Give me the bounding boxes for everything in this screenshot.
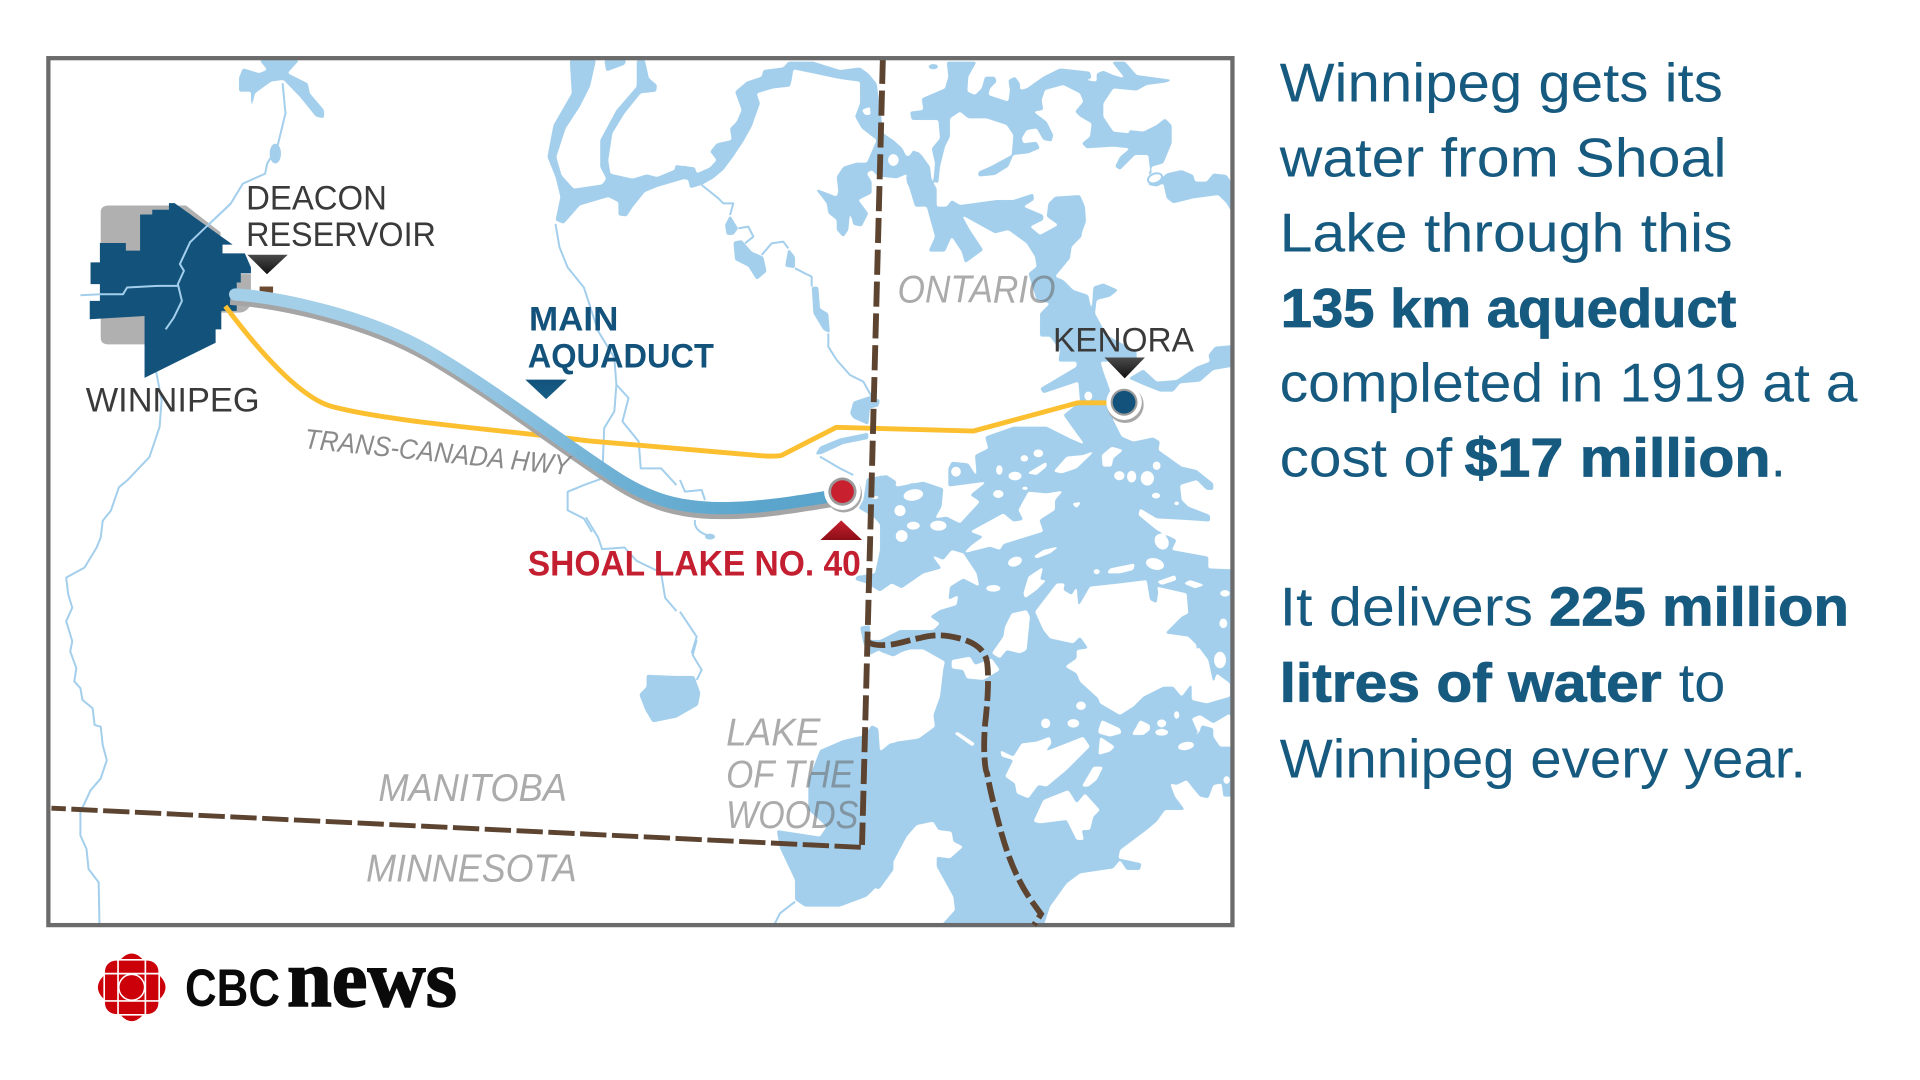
label: Lake of the Woods [726,712,858,837]
text block: aqueduct facts: . [1771,426,1786,488]
text block: aqueduct facts: water from Shoal [1279,126,1727,188]
label: Trans-Canada Hwy: TRANS-CANADA HWY [303,423,574,481]
text block: aqueduct facts: Winnipeg every year. [1280,728,1806,790]
border: Manitoba-Ontario [862,59,883,845]
wordmark: CBC: CBC [185,959,280,1018]
text block: aqueduct facts: $17 million [1464,426,1771,488]
label: Winnipeg: WINNIPEG [86,381,260,419]
text block: aqueduct facts: 225 million [1549,576,1849,638]
text block: aqueduct facts: to [1679,652,1725,714]
label: Main Aquaduct: AQUADUCT [528,337,714,375]
label: Main Aquaduct [525,301,714,399]
wordmark: news: news [287,933,457,1024]
label: Deacon Reservoir: RESERVOIR [246,216,436,254]
label: Manitoba: MANITOBA [378,767,567,810]
label: Deacon Reservoir [246,179,436,274]
Winnipeg rivers [80,204,231,329]
rivers [66,83,1163,925]
Winnipeg city polygon [90,203,251,378]
Winnipeg grey metro area [101,205,251,344]
label: Kenora [1053,321,1194,378]
text block: aqueduct facts [1279,52,1858,790]
label: Lake of the Woods: OF THE [726,753,854,796]
map water: lakes and rivers [66,60,1233,927]
text block: aqueduct facts: litres of water [1280,652,1662,714]
Winnipeg city area [80,203,251,378]
label: Deacon Reservoir: DEACON [246,179,387,217]
text block: aqueduct facts: cost of [1280,426,1453,488]
panel: map [48,58,1233,927]
label: Shoal Lake No. 40 [528,520,862,584]
lakes [239,60,1233,927]
border: Canada-US [51,808,861,847]
text block: aqueduct facts: It delivers [1280,576,1533,638]
pin: Shoal Lake [824,473,862,512]
main aqueduct line [235,294,833,508]
text block: aqueduct facts: Lake through this [1280,202,1733,264]
label: Main Aquaduct: MAIN [529,301,618,339]
highway: Trans-Canada [225,306,1108,456]
map frame [48,58,1232,925]
pin: Kenora [1106,384,1144,423]
map contents [48,58,1232,925]
border: Lake of the Woods [867,635,1041,925]
icon: CBC gem [98,953,166,1021]
label: Lake of the Woods: LAKE [726,712,821,755]
label: Minnesota: MINNESOTA [366,848,577,891]
label: Kenora: KENORA [1053,321,1194,359]
label: Ontario: ONTARIO [898,268,1056,311]
Deacon reservoir marker [260,287,273,293]
text block: aqueduct facts: completed in 1919 at a [1280,352,1858,414]
text block: aqueduct facts: 135 km aqueduct [1281,277,1736,339]
label: Lake of the Woods: WOODS [726,794,858,837]
text block: aqueduct facts: Winnipeg gets its [1280,52,1723,114]
label: Shoal Lake No. 40: SHOAL LAKE NO. 40 [528,545,861,584]
aqueduct shadow [230,300,833,514]
logo: CBC News [98,933,457,1024]
